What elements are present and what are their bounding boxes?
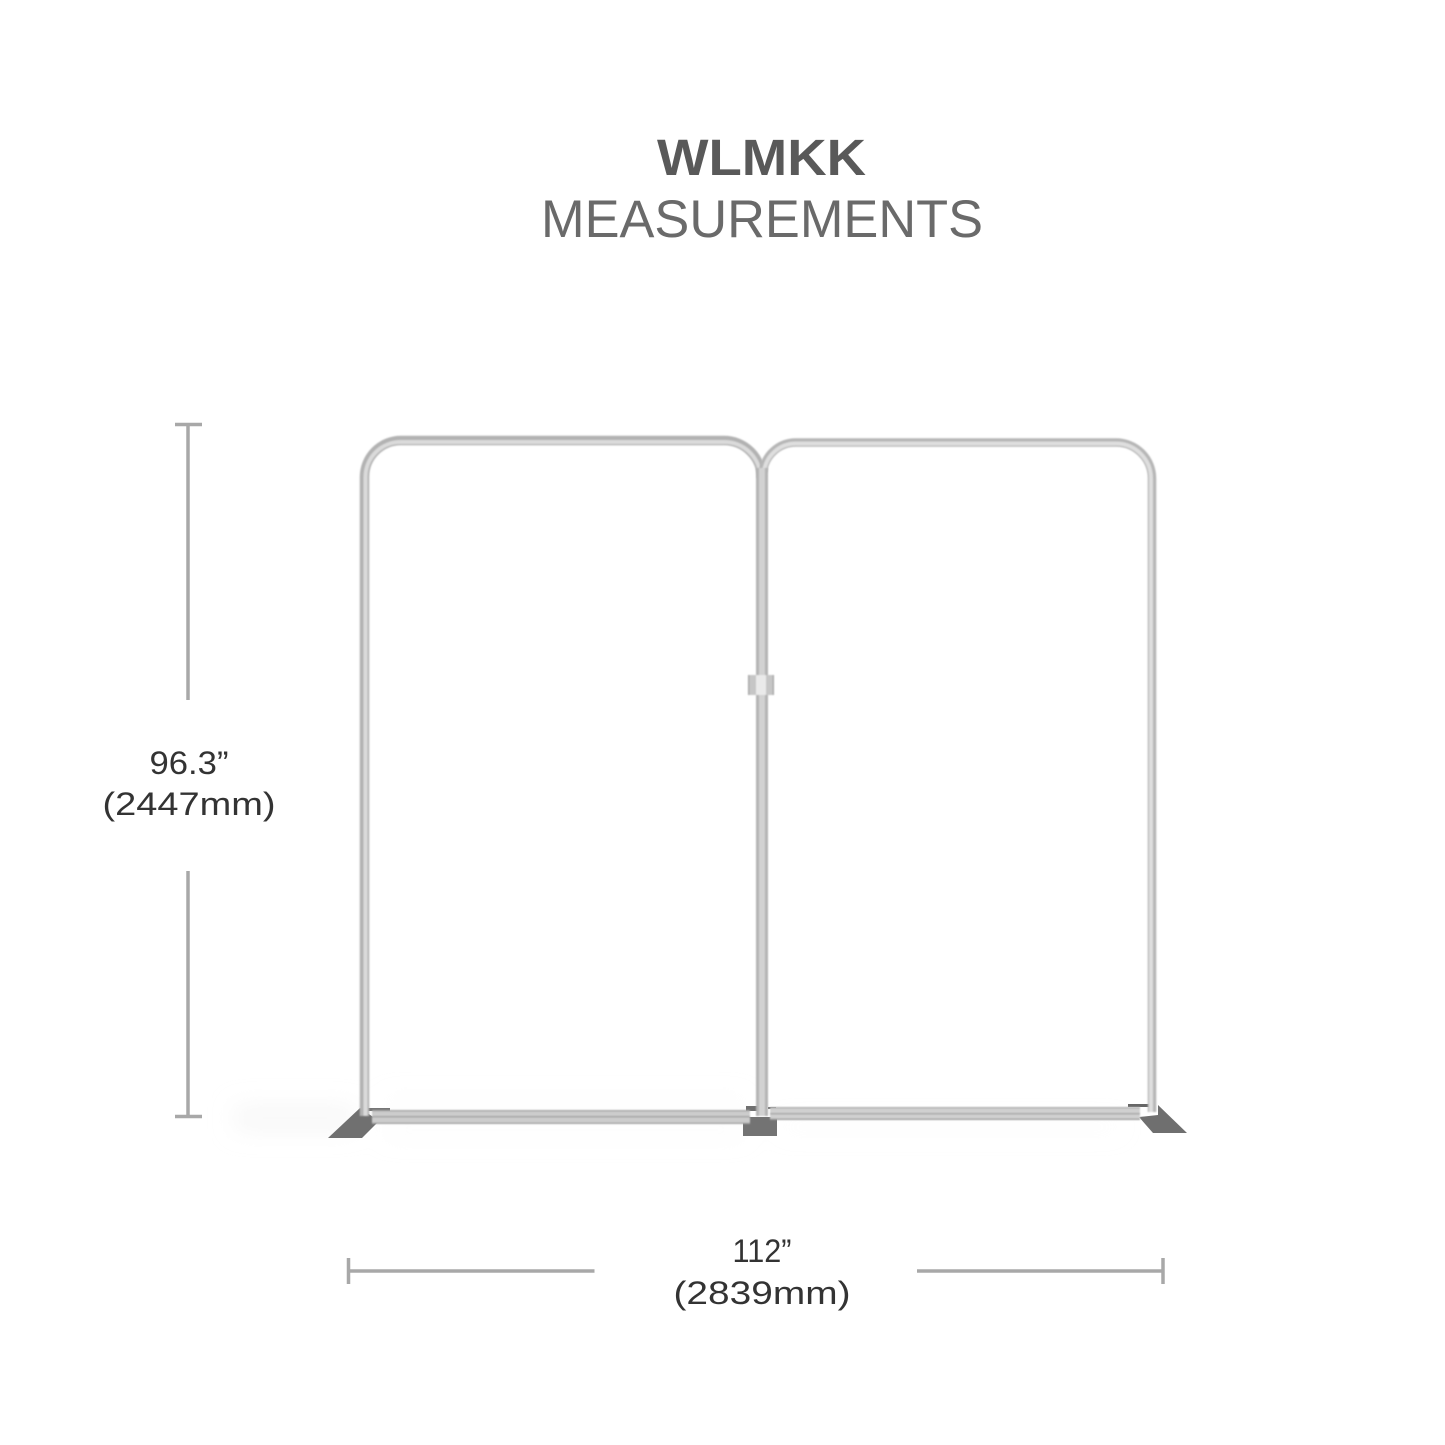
left foot bbox=[328, 1108, 390, 1138]
height dimension: (2447mm) bbox=[102, 786, 276, 822]
left bottom rail bbox=[372, 1110, 750, 1124]
floor shadow bbox=[235, 1098, 1120, 1136]
title: WLMKK bbox=[657, 129, 866, 186]
height dimension bbox=[102, 424, 276, 1117]
title: MEASUREMENTS bbox=[541, 190, 983, 249]
width dimension: (2839mm) bbox=[674, 1275, 850, 1311]
right foot bbox=[1128, 1104, 1187, 1133]
width dimension bbox=[348, 1233, 1163, 1311]
height label: 96.3” bbox=[150, 745, 228, 781]
title bbox=[541, 129, 983, 249]
centre pole bbox=[756, 468, 768, 1116]
width dimension line bbox=[348, 1258, 1163, 1284]
centre foot bbox=[743, 1106, 777, 1136]
right frame tube bbox=[763, 442, 1152, 1112]
centre clamp bbox=[748, 675, 774, 695]
backdrop frame bbox=[235, 440, 1187, 1138]
left frame tube bbox=[364, 440, 762, 1116]
height dimension line bbox=[175, 424, 202, 1117]
right bottom rail bbox=[770, 1107, 1140, 1120]
width label: 112” bbox=[732, 1233, 792, 1269]
